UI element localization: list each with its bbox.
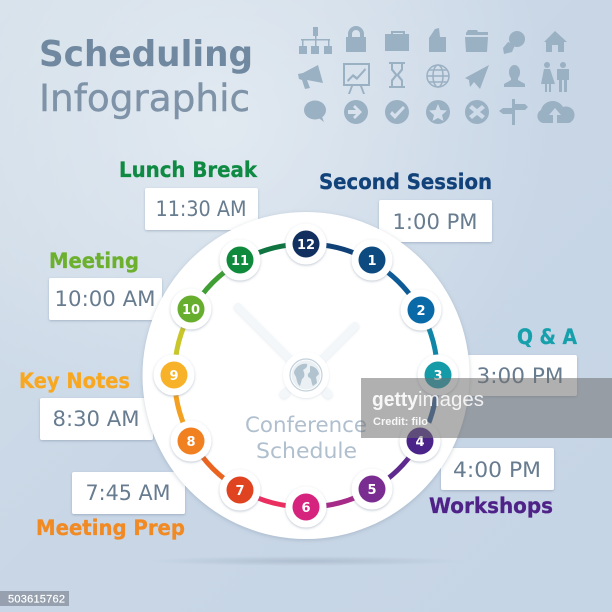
label: Key Notes: Key Notes (19, 369, 130, 393)
node 2: 2 (416, 304, 426, 319)
time box: 3:00 PM (464, 355, 577, 396)
node 10 (170, 288, 212, 330)
time box: 1:00 PM (379, 200, 492, 242)
node 1: 1 (367, 254, 377, 269)
node 10: 10 (182, 303, 200, 318)
time box: 8:30 AM: 8:30 AM (52, 407, 140, 431)
label: Meeting Prep: Meeting Prep (36, 516, 185, 540)
watermark band (361, 378, 612, 438)
icon: check circle (385, 100, 409, 124)
watermark band: getty (372, 389, 419, 411)
watermark band: Credit: filo (373, 416, 428, 428)
node 6: 6 (301, 501, 311, 516)
title: Infographic (39, 77, 250, 120)
icon: upload cloud (537, 101, 575, 123)
node 4: 4 (415, 435, 425, 450)
time box: 3:00 PM: 3:00 PM (476, 364, 564, 388)
node 7 (220, 470, 260, 510)
node 5: 5 (367, 483, 377, 498)
time box: 7:45 AM: 7:45 AM (86, 481, 170, 505)
icon: megaphone (298, 65, 323, 89)
time box: 1:00 PM: 1:00 PM (392, 210, 478, 234)
label: Second Session: Second Session (319, 170, 492, 194)
node 11: 11 (231, 254, 249, 269)
icon: folder (465, 30, 488, 52)
node 9: 9 (169, 369, 179, 384)
node 4 (400, 420, 440, 462)
node 8: 8 (186, 435, 196, 450)
icon: house (544, 31, 567, 52)
icon: presentation chart (343, 63, 370, 94)
image id tag (0, 591, 69, 606)
panel: clock schedule (40, 188, 577, 539)
icon: briefcase (385, 31, 409, 51)
time box: 11:30 AM (145, 188, 258, 230)
center caption (245, 413, 367, 463)
icon: globe clock center (283, 352, 329, 398)
icon: org chart (299, 27, 332, 54)
node 5 (352, 468, 392, 510)
icon: arrow circle (344, 100, 368, 124)
clock face (142, 212, 470, 539)
time box: 11:30 AM: 11:30 AM (156, 197, 246, 221)
node 11 (220, 240, 260, 280)
label: Lunch Break: Lunch Break (119, 158, 258, 182)
icon: man and woman (541, 62, 569, 92)
center caption: Schedule (256, 439, 357, 463)
node 6 (286, 486, 326, 528)
clock shadow (151, 556, 461, 566)
icon: cross circle (465, 100, 489, 124)
icon grid (298, 26, 575, 125)
icon: globe (427, 65, 449, 87)
time box: 4:00 PM (441, 448, 554, 490)
title: Scheduling (39, 34, 253, 75)
time box: 10:00 AM (49, 278, 162, 320)
image id tag: 503615762 (8, 594, 65, 606)
label: Workshops: Workshops (429, 494, 553, 518)
node 2 (400, 290, 442, 330)
time box: 10:00 AM: 10:00 AM (54, 287, 156, 311)
icon: person (504, 65, 525, 87)
time box: 4:00 PM: 4:00 PM (453, 458, 541, 482)
icon: speech bubble (304, 100, 326, 122)
node 3 (418, 354, 458, 396)
icon: signpost (499, 99, 528, 125)
time box: 7:45 AM (72, 472, 185, 514)
node 12 (286, 224, 326, 264)
label: Q & A: Q & A (517, 325, 578, 349)
node 12: 12 (297, 238, 315, 253)
icon: padlock (346, 26, 366, 52)
node 8 (170, 420, 212, 462)
icon: paper plane (465, 65, 489, 89)
clock hands (238, 307, 355, 394)
node 1 (352, 240, 392, 280)
watermark band: images (418, 389, 484, 411)
center caption: Conference (245, 413, 367, 437)
title (39, 34, 253, 120)
node 7: 7 (235, 484, 245, 499)
colored ring (174, 244, 438, 507)
icon: hourglass (389, 62, 405, 88)
time box: 8:30 AM (40, 398, 153, 440)
node 9 (154, 354, 194, 396)
node 3: 3 (433, 369, 443, 384)
icon: question bubbles (503, 31, 525, 54)
icon: thumbs up (429, 28, 446, 52)
icon: star circle (426, 100, 450, 124)
label: Meeting: Meeting (49, 249, 139, 273)
